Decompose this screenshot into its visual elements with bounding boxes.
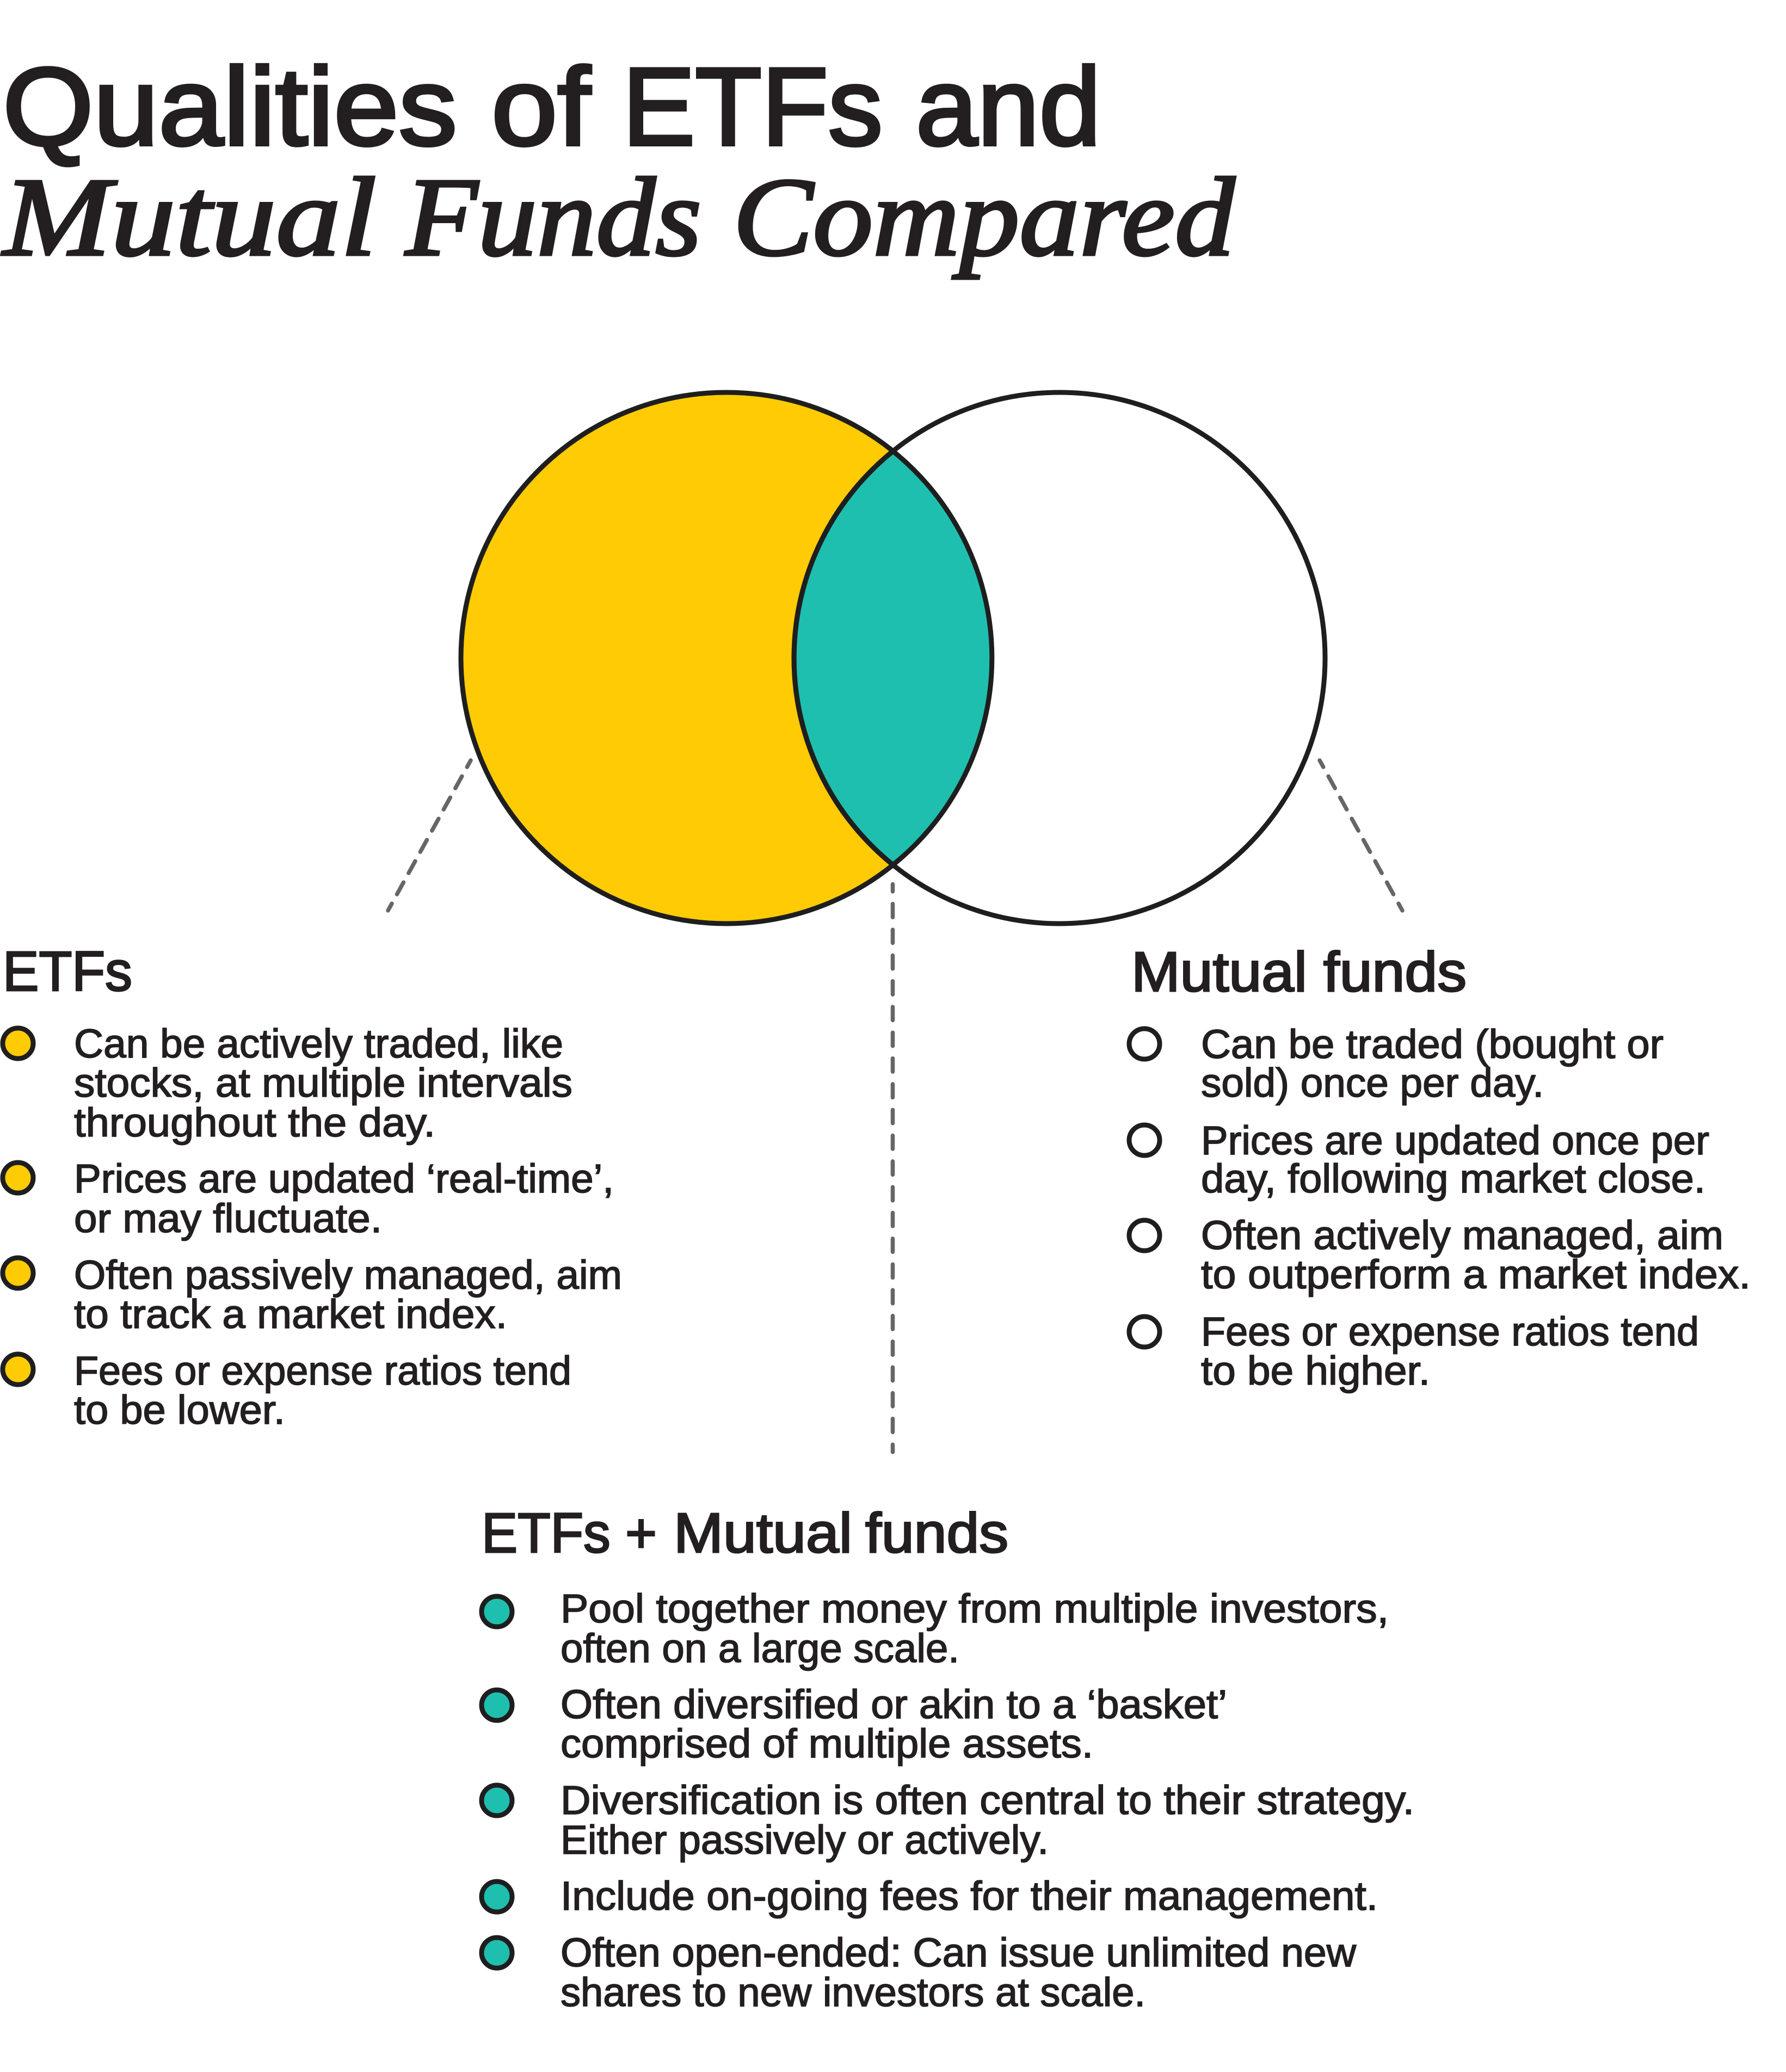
item 1: Pool together money from multiple investors,	[561, 1586, 1389, 1631]
title: of	[491, 45, 591, 169]
item 4	[1129, 1309, 1699, 1393]
title: Mutual	[2, 155, 377, 279]
panel: ETFs	[3, 940, 622, 1432]
item 4: Fees or expense ratios tend	[1201, 1309, 1699, 1354]
dashed connector: ETFs	[388, 760, 471, 911]
heading: ETFs + Mutual funds	[482, 1502, 1008, 1564]
heading: ETFs + Mutual funds: funds	[865, 1502, 1008, 1564]
item 3: Diversification is often central to their strategy.	[561, 1778, 1414, 1823]
item 2	[3, 1156, 614, 1241]
item 1	[482, 1586, 1389, 1671]
item 4: Fees or expense ratios tend	[74, 1348, 571, 1393]
item 1: Can be traded (bought or	[1201, 1022, 1664, 1067]
item 1: Can be actively traded, like	[74, 1021, 563, 1066]
overlap lens	[794, 451, 992, 865]
item 3	[482, 1778, 1414, 1862]
title: Qualities	[3, 45, 457, 169]
item 4	[3, 1348, 571, 1432]
item 3: to track a market index.	[74, 1292, 507, 1337]
item 3: Often actively managed, aim	[1201, 1213, 1723, 1258]
title: ETFs	[623, 45, 883, 169]
dashed connector: both	[891, 884, 895, 1452]
item 2: Prices are updated once per	[1201, 1118, 1709, 1163]
Mutual funds circle	[794, 392, 1325, 924]
item 2: day, following market close.	[1201, 1156, 1705, 1201]
heading: ETFs + Mutual funds: Mutual	[674, 1502, 852, 1564]
item 1: stocks, at multiple intervals	[74, 1060, 572, 1105]
panel: Mutual funds	[1129, 940, 1751, 1393]
item 2: or may fluctuate.	[74, 1196, 382, 1241]
item 2: Prices are updated ‘real-time’,	[74, 1156, 614, 1201]
panel: ETFs + Mutual funds	[482, 1502, 1414, 2015]
item 5: Often open-ended: Can issue unlimited new	[561, 1930, 1357, 1975]
item 4: to be higher.	[1201, 1348, 1430, 1393]
item 2: Often diversified or akin to a ‘basket’	[561, 1682, 1227, 1727]
item 4: to be lower.	[74, 1387, 285, 1432]
heading: ETFs: ETFs	[3, 940, 132, 1003]
dashed connector: Mutual funds	[1320, 760, 1402, 911]
venn diagram	[461, 392, 1325, 924]
item 3: to outperform a market index.	[1201, 1252, 1751, 1297]
item 1: sold) once per day.	[1201, 1060, 1544, 1105]
item 2	[482, 1682, 1227, 1766]
item 1: often on a large scale.	[561, 1626, 959, 1671]
item 2: comprised of multiple assets.	[561, 1721, 1093, 1766]
heading: Mutual funds: Mutual funds	[1131, 940, 1467, 1003]
title	[2, 45, 1235, 279]
title: Compared	[733, 155, 1235, 279]
item 4: Include on-going fees for their management.	[561, 1873, 1378, 1919]
item 3	[1129, 1213, 1751, 1297]
heading: ETFs + Mutual funds: ETFs +	[482, 1502, 657, 1564]
title: and	[916, 45, 1101, 169]
ETFs circle	[461, 392, 992, 924]
item 3	[3, 1252, 622, 1337]
item 2	[1129, 1118, 1709, 1201]
item 5	[482, 1930, 1357, 2015]
item 1	[1129, 1022, 1664, 1105]
item 3: Either passively or actively.	[561, 1817, 1049, 1862]
item 1	[3, 1021, 572, 1145]
item 1: throughout the day.	[74, 1100, 435, 1145]
title: Funds	[404, 155, 701, 279]
item 3: Often passively managed, aim	[74, 1252, 622, 1298]
item 5: shares to new investors at scale.	[561, 1970, 1145, 2015]
